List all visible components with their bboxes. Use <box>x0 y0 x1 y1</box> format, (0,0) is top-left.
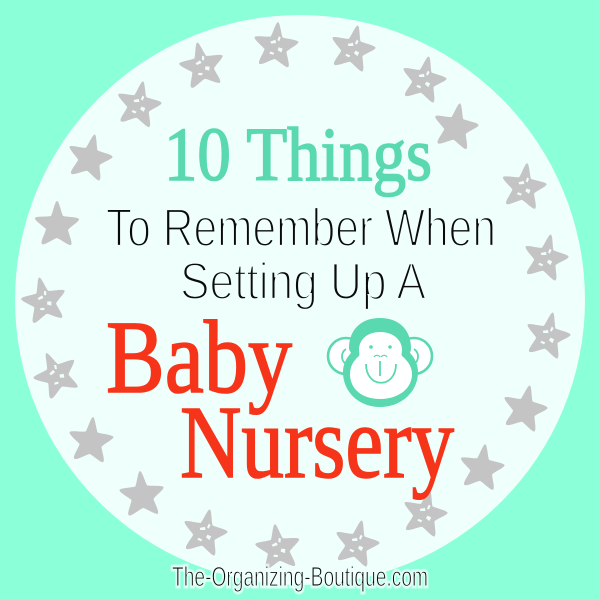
subheading line: Setting Up A: Setting Up A <box>180 253 426 311</box>
icon: monkey <box>328 318 432 407</box>
title word: Nursery: Nursery <box>180 385 454 500</box>
footer website text: The-Organizing-Boutique.com <box>172 561 428 592</box>
heading: 10 Things: 10 Things <box>164 113 432 197</box>
footer website text <box>172 561 428 592</box>
subheading line: To Remember When: To Remember When <box>106 198 496 258</box>
footer website text: The-Organizing-Boutique.com <box>172 561 428 592</box>
title word: Baby: Baby <box>106 300 292 415</box>
